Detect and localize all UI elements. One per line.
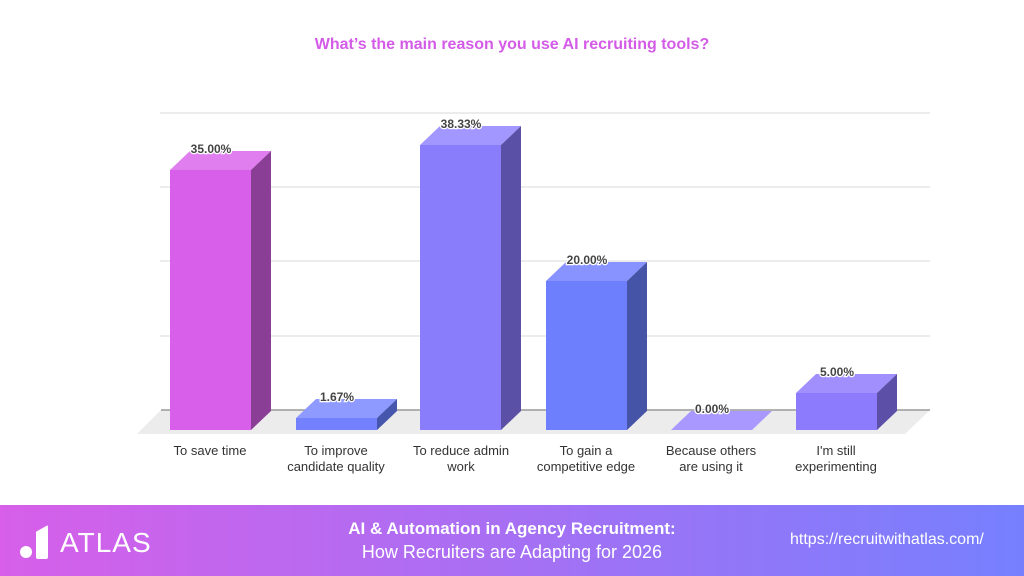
value labels: 0.00% — [695, 402, 729, 416]
value labels: 5.00% — [820, 365, 854, 379]
value labels — [191, 117, 854, 416]
category labels: To improve — [304, 443, 368, 458]
footer banner — [0, 505, 1024, 576]
category labels: To save time — [174, 443, 246, 458]
bar: others using it — [671, 411, 772, 430]
category labels — [174, 443, 877, 474]
category labels: To reduce admin — [413, 443, 509, 458]
footer title — [348, 519, 676, 562]
category labels: candidate quality — [287, 459, 385, 474]
bar: reduce admin work — [420, 126, 521, 430]
value labels: 1.67% — [320, 390, 354, 404]
logo: ATLAS: ATLAS — [60, 527, 152, 558]
title: What’s the main reason you use AI recruiting tools? — [315, 36, 709, 53]
floor — [137, 410, 930, 434]
bar: still experimenting — [796, 374, 897, 430]
footer title: How Recruiters are Adapting for 2026 — [362, 542, 662, 562]
bar: to save time — [170, 151, 271, 430]
category labels: work — [446, 459, 475, 474]
category labels: are using it — [679, 459, 743, 474]
footer title: AI & Automation in Agency Recruitment: — [348, 519, 676, 538]
category labels: To gain a — [560, 443, 613, 458]
category labels: I'm still — [816, 443, 856, 458]
bar: improve candidate quality — [296, 399, 397, 430]
category labels: experimenting — [795, 459, 877, 474]
category labels: Because others — [666, 443, 757, 458]
value labels: 20.00% — [567, 253, 608, 267]
value labels: 35.00% — [191, 142, 232, 156]
url: https://recruitwithatlas.com/ — [790, 531, 984, 548]
bar: competitive edge — [546, 262, 647, 430]
category labels: competitive edge — [537, 459, 635, 474]
value labels: 38.33% — [441, 117, 482, 131]
logo: ATLAS — [20, 526, 152, 559]
